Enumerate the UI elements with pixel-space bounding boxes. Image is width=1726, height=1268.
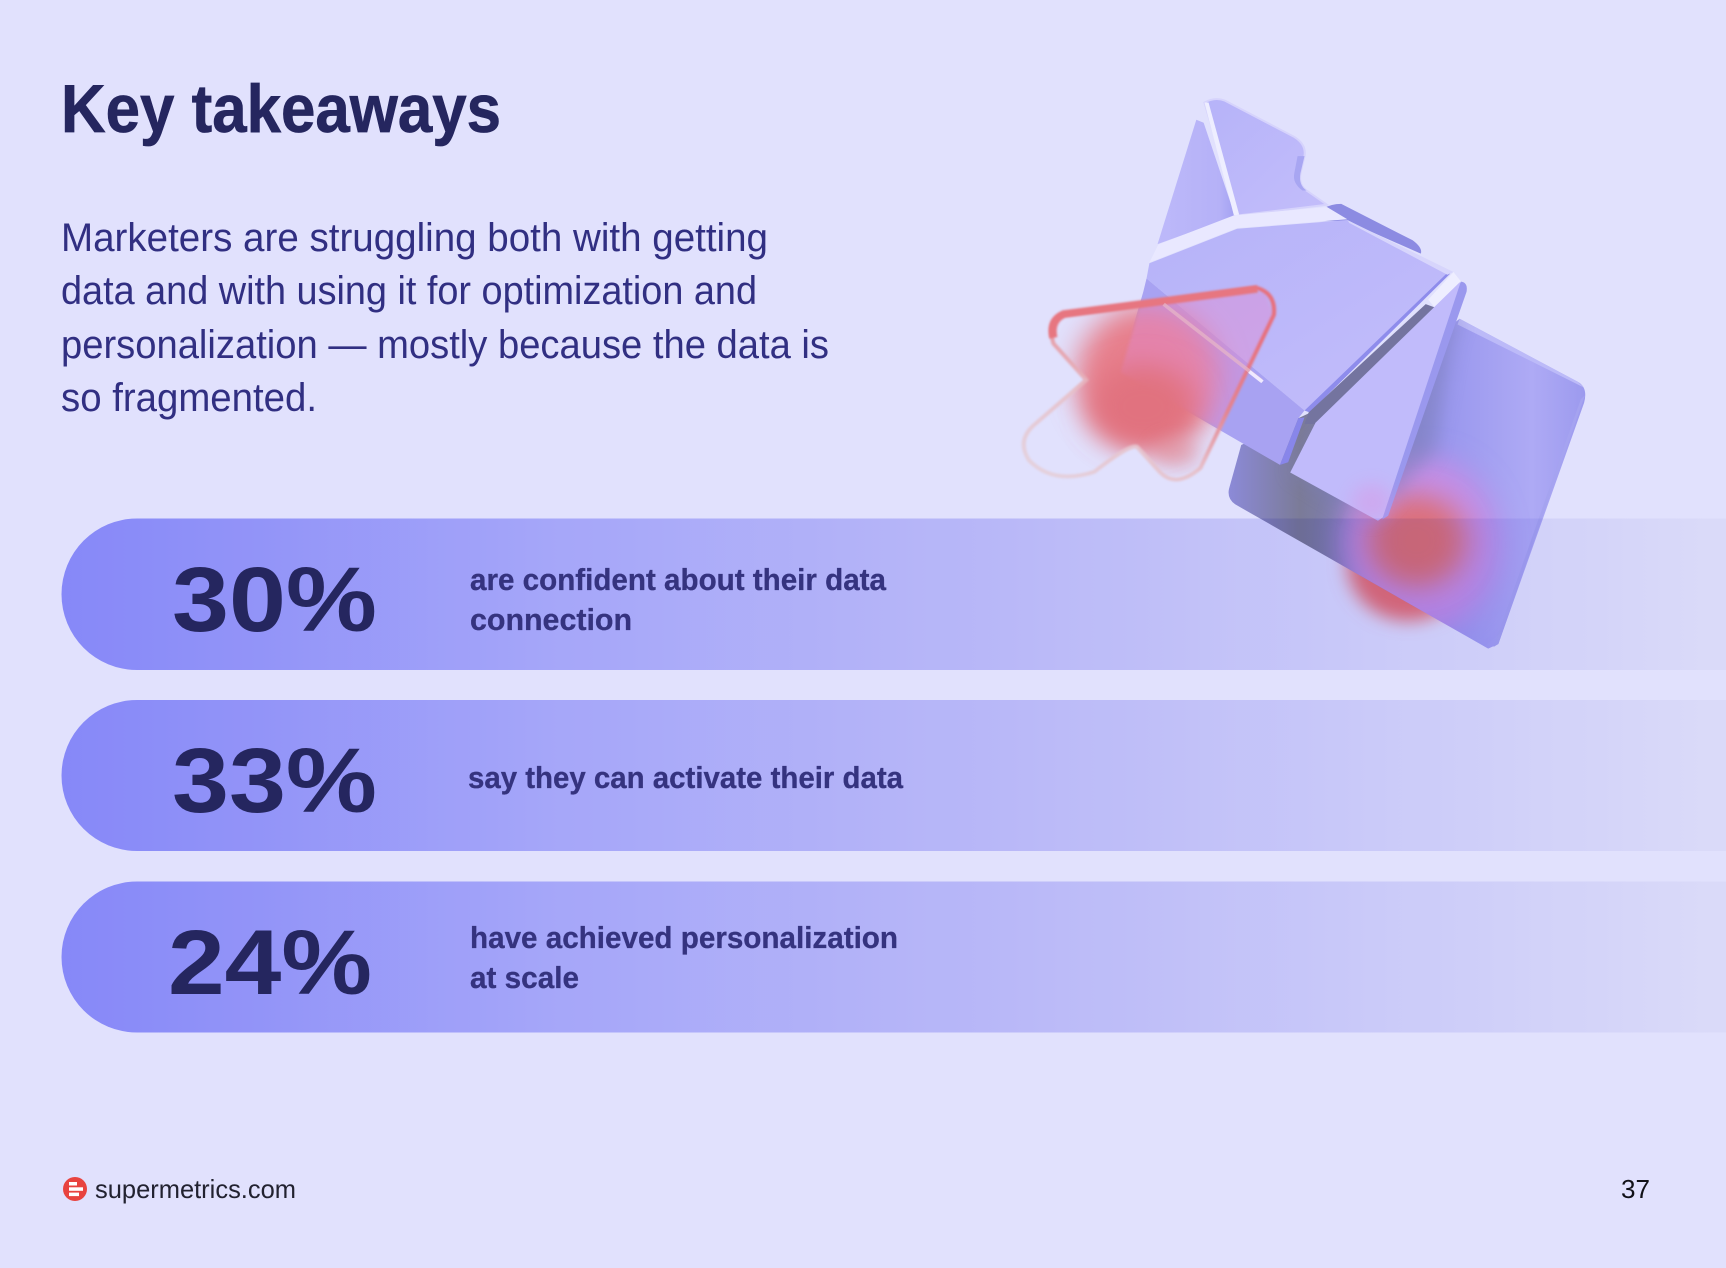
intro paragraph: so fragmented. [61, 376, 317, 420]
stat 2 label: say they can activate their data [468, 760, 904, 795]
white gap strip [1149, 207, 1347, 262]
stat 3 label: have achieved personalization [470, 920, 898, 955]
bar 3 [62, 882, 1726, 1032]
stat 3 label: at scale [470, 960, 579, 995]
footer website: supermetrics.com [95, 1174, 296, 1204]
intro paragraph: personalization — mostly because the data is [61, 323, 829, 367]
stat 3: 24%: 24% [168, 912, 372, 1014]
stat 1 label: connection [470, 602, 632, 637]
footer logo [63, 1177, 87, 1201]
page number: 37 [1621, 1174, 1650, 1204]
back plate [1229, 315, 1585, 649]
top flap tab [1315, 204, 1421, 254]
stat 2: 33% [172, 730, 904, 832]
top flap [1204, 99, 1327, 215]
centre folded panel [1147, 220, 1453, 412]
intro paragraph: Marketers are struggling both with getting [61, 216, 768, 260]
stat 2: 33%: 33% [172, 730, 377, 832]
stat 1: 30%: 30% [172, 549, 377, 651]
red glow behind plate [1347, 506, 1470, 621]
top left triangle [1158, 120, 1235, 244]
stat 1 label [470, 562, 887, 637]
stat bars [62, 518, 1726, 1032]
dark fold shadow [1304, 304, 1436, 424]
stat 3 label [470, 920, 898, 995]
bar 2 [62, 700, 1726, 851]
stat 3: 24% [168, 912, 898, 1014]
lower folded strip [1121, 279, 1304, 465]
title: Key takeaways [61, 71, 501, 147]
bar 1 [62, 518, 1726, 670]
illustration: 3D glass envelope and cursor [1024, 99, 1585, 649]
stat 1: 30% [172, 549, 887, 651]
glass cursor arrow [1024, 288, 1274, 480]
right triangular flap [1290, 282, 1467, 522]
light gap at top of fold [1428, 272, 1461, 308]
intro paragraph [61, 216, 829, 420]
intro paragraph: data and with using it for optimization and [61, 269, 757, 313]
stat 1 label: are confident about their data [470, 562, 887, 597]
